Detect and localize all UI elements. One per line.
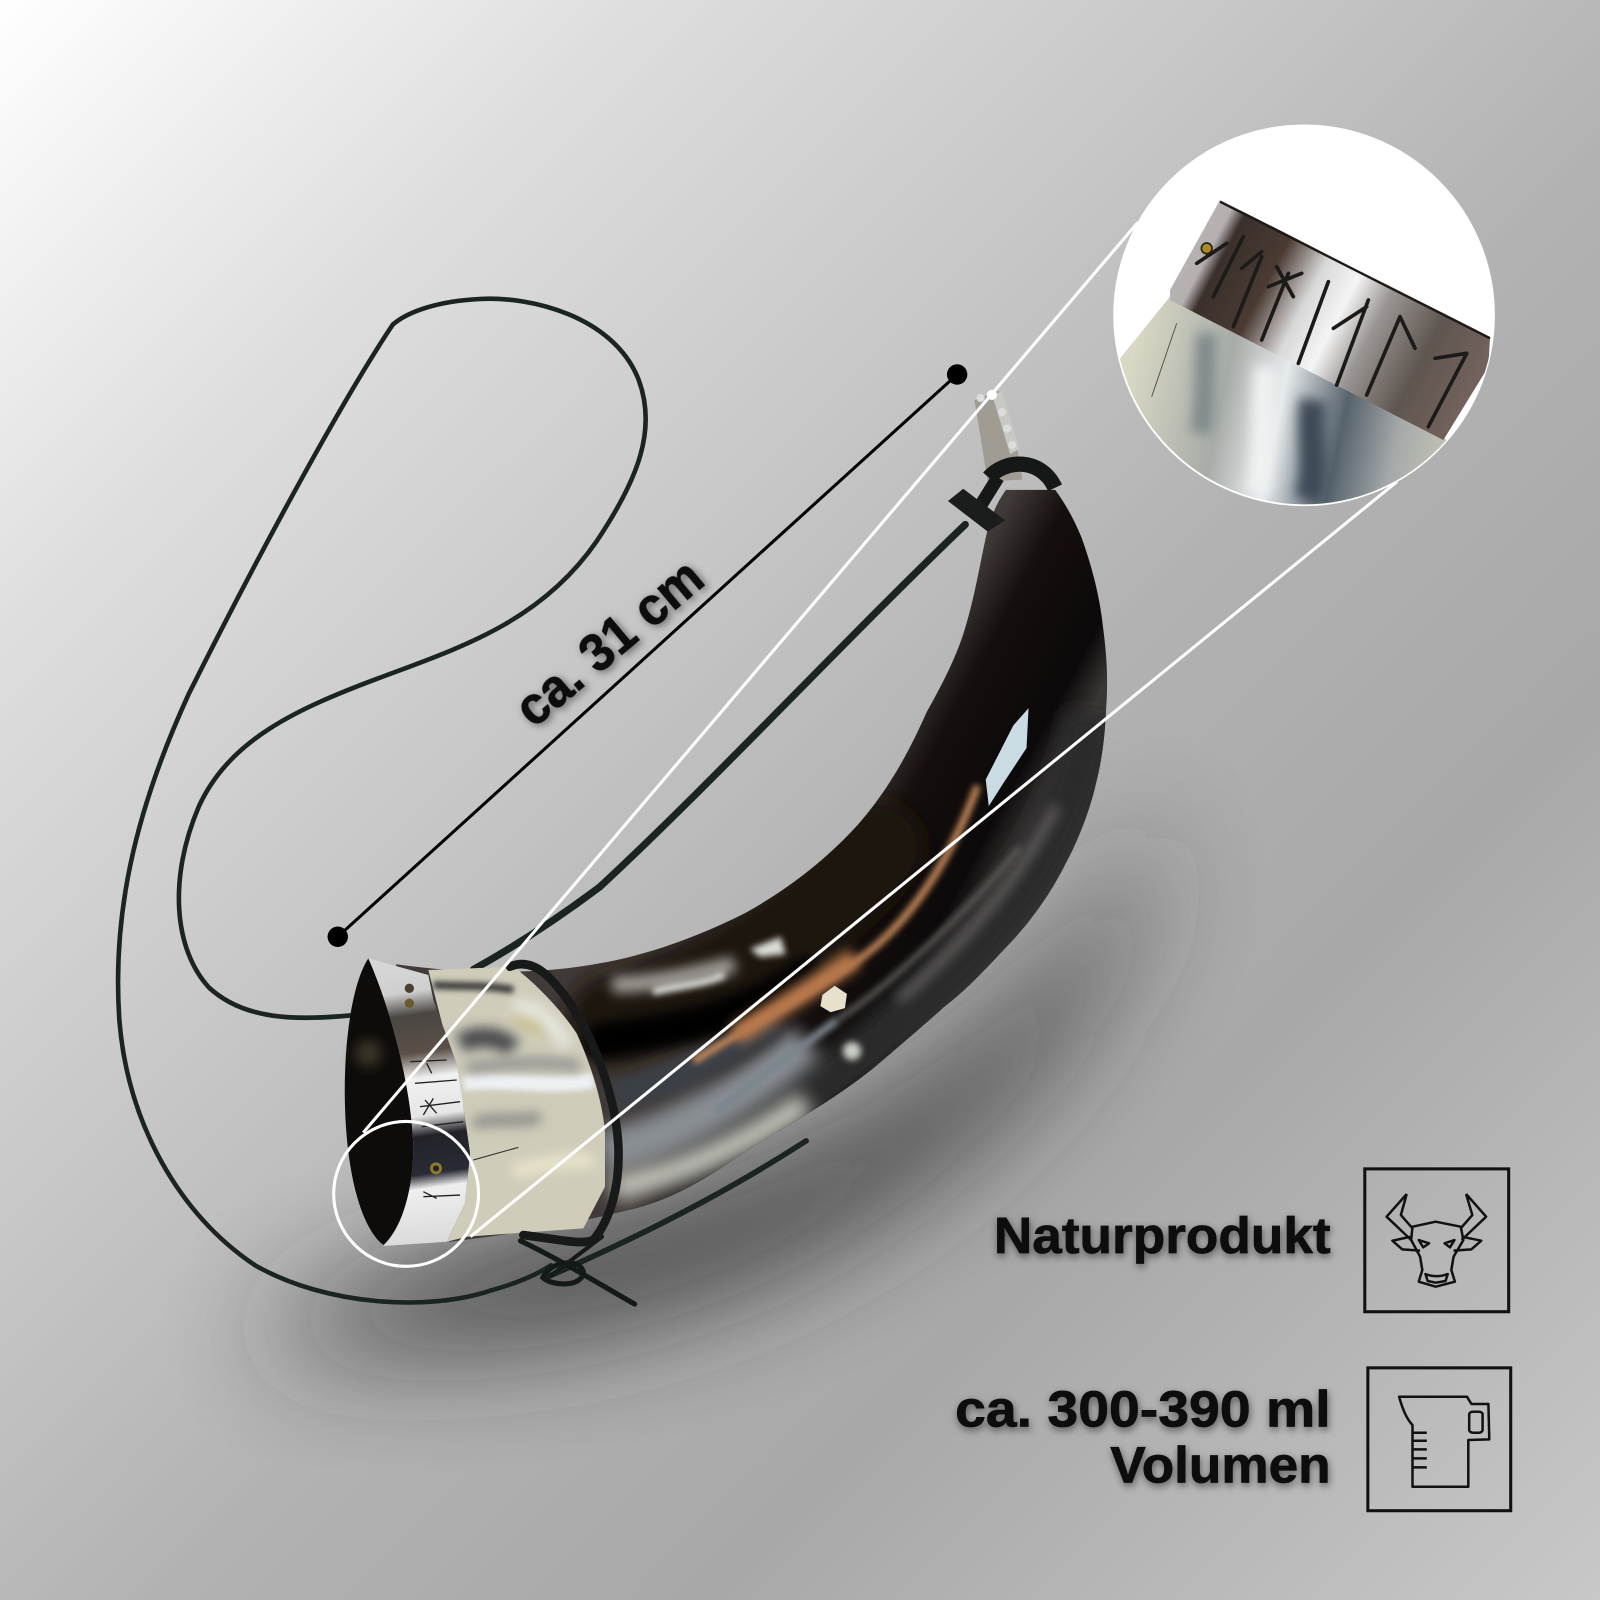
icon: bull head xyxy=(1387,1194,1486,1287)
leather ring xyxy=(510,964,619,1242)
feature: natural product xyxy=(994,1169,1509,1312)
engraved runes xyxy=(410,1060,463,1198)
metal tip xyxy=(974,390,1022,482)
white fleck xyxy=(820,986,847,1012)
silver band xyxy=(368,958,470,1246)
cord knot at tip xyxy=(948,489,1005,532)
band edge xyxy=(1220,202,1490,338)
mouth interior xyxy=(345,958,413,1245)
magnified horn surface xyxy=(1120,296,1446,504)
specular highlight: copper xyxy=(694,786,978,1061)
tie strap to ring xyxy=(974,478,998,515)
rivet xyxy=(1201,243,1212,254)
drinking horn xyxy=(345,390,1133,1265)
dimension line: length of horn xyxy=(328,364,967,947)
hanging cord xyxy=(118,299,965,1302)
horn cast shadow xyxy=(245,806,1163,1348)
horn body xyxy=(396,490,1108,1242)
magnified silver band xyxy=(1170,200,1490,440)
tip ring xyxy=(989,464,1055,488)
rivets xyxy=(405,984,442,1174)
label: ca. 300-390 ml xyxy=(955,1381,1331,1438)
zoom indicator lines xyxy=(363,222,1397,1237)
cream horn section xyxy=(427,960,613,1247)
cord knot at mouth xyxy=(520,1237,635,1304)
dimension label: ca. 31 cm xyxy=(503,547,715,738)
small zoom circle xyxy=(334,1121,479,1266)
feature: volume xyxy=(955,1368,1511,1511)
mouth section in local coordinates xyxy=(345,958,619,1247)
white streak fleck xyxy=(750,937,786,957)
runes xyxy=(1197,237,1467,427)
label: Volumen xyxy=(1110,1437,1331,1494)
magnified detail circle xyxy=(1113,124,1495,506)
specular highlight: blue white xyxy=(986,708,1029,806)
mouth interior mottling xyxy=(355,1040,382,1067)
icon frame xyxy=(1365,1169,1509,1312)
icon frame xyxy=(1368,1368,1511,1511)
icon: measuring jug xyxy=(1399,1397,1489,1487)
label: Naturprodukt xyxy=(994,1207,1331,1264)
